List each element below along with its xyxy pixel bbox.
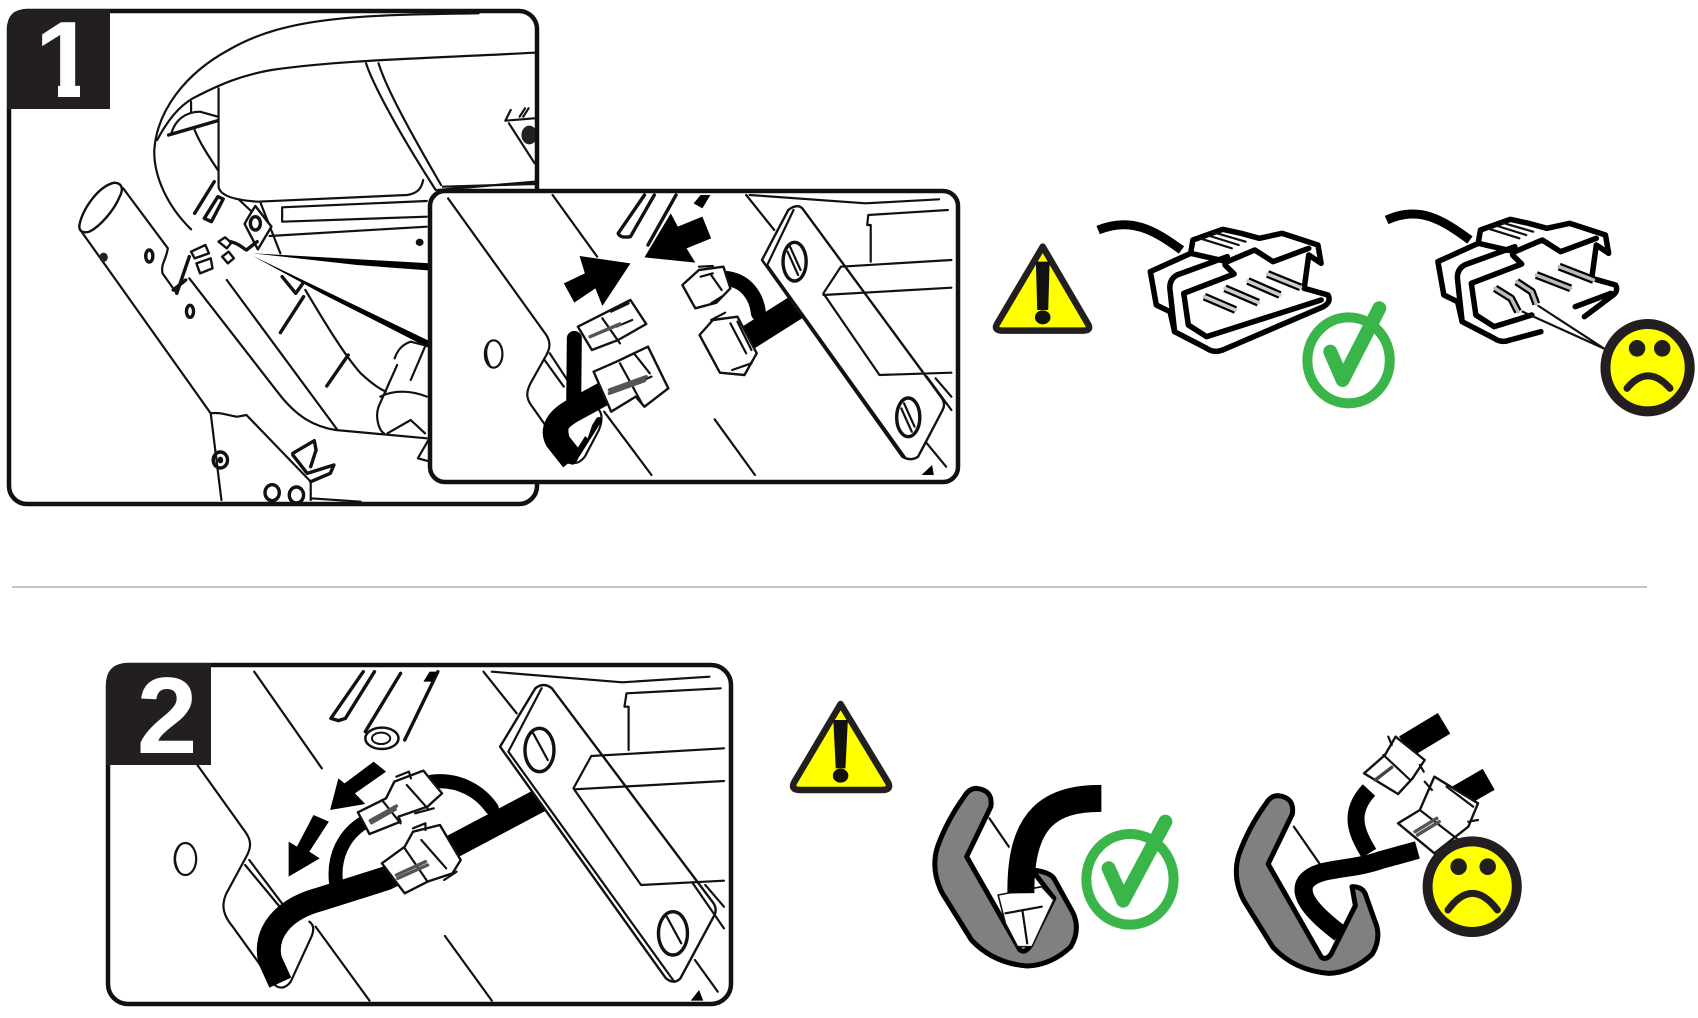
clip with cable: wrong routing (1236, 723, 1489, 973)
warning icon: step 1 (996, 247, 1089, 331)
arrow: upper connector direction (330, 762, 386, 810)
number box: step 1 (7, 9, 110, 109)
divider (12, 586, 1647, 588)
connector: right lower (700, 317, 757, 375)
warning icon: step 2 (793, 704, 889, 790)
number box: step 2 (106, 655, 211, 777)
cable: left loop (561, 338, 574, 457)
connector: correct pins (1098, 225, 1329, 351)
clip with cable: correct routing (935, 788, 1101, 966)
cable: right bundle (744, 307, 797, 340)
panel: step 1 detail inset (430, 191, 958, 482)
panel: step 1 (7, 0, 537, 504)
number box: step 2: 2 (137, 655, 197, 777)
illustration: connectors joined (175, 672, 724, 1001)
number box: step 1: 1 (35, 0, 95, 121)
connector: upper mated (358, 771, 442, 834)
sad face: wrong routing (1428, 841, 1517, 932)
inset frame (430, 191, 958, 482)
connector: right upper (682, 267, 730, 308)
arrow: push left connector (644, 213, 711, 263)
panel frame: step 1 (9, 11, 537, 504)
connector: bent pins (1387, 214, 1617, 348)
panel frame: step 2 (108, 665, 731, 1004)
sad face: bent pins (1605, 324, 1690, 411)
arrow: lower connector direction (289, 815, 329, 877)
panel: step 2 (106, 655, 731, 1004)
illustration: connectors apart (448, 195, 951, 475)
check mark: correct pins (1307, 308, 1390, 403)
connector: left lower (594, 347, 668, 412)
connector: lower mated (382, 825, 461, 893)
illustration: machine frame overview (79, 13, 537, 503)
cable: main run (269, 798, 544, 983)
arrow: push right connector (564, 256, 630, 306)
cable: branch (336, 781, 492, 885)
connector: left upper (578, 300, 646, 350)
check mark: correct routing (1086, 822, 1174, 925)
